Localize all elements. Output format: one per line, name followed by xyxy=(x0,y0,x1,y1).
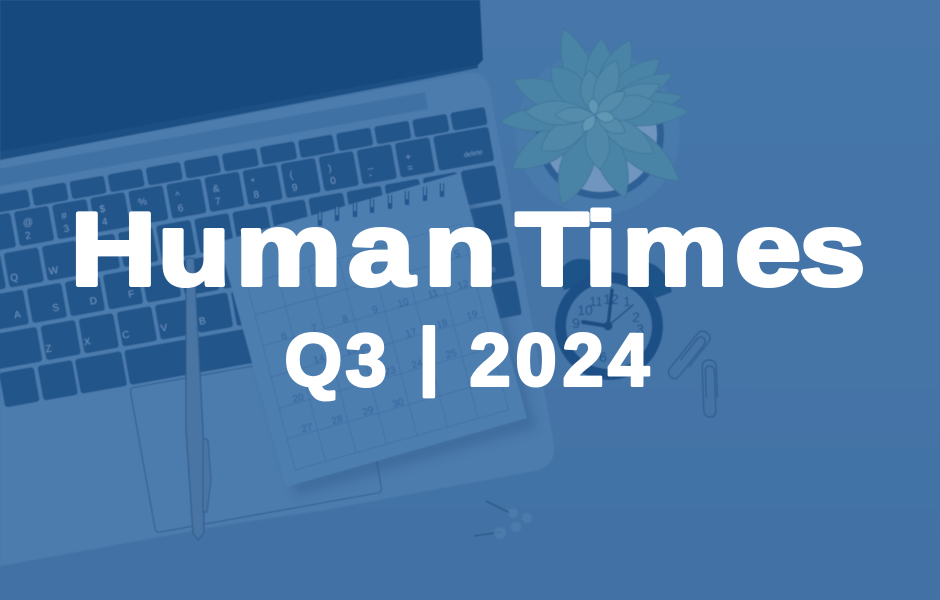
calendar numbers: 6 xyxy=(280,330,289,343)
key legends: 7 xyxy=(214,196,222,208)
pushpin bottom xyxy=(474,532,502,536)
key legends: A xyxy=(13,309,22,321)
key legends: Z xyxy=(45,343,53,355)
key legends: * xyxy=(250,177,256,188)
clock numerals: 2 xyxy=(632,309,640,325)
calendar numbers xyxy=(280,248,480,435)
calendar numbers: 28 xyxy=(330,414,345,427)
calendar spiral binding xyxy=(320,183,442,226)
laptop screen xyxy=(0,0,483,152)
key legends: enter xyxy=(455,225,472,235)
key legends: % xyxy=(137,196,148,209)
paperclip right xyxy=(702,360,718,417)
key legends: 3 xyxy=(63,223,71,235)
calendar numbers: 12 xyxy=(456,279,471,292)
key legends: 8 xyxy=(253,189,261,201)
key legends: _ xyxy=(365,159,374,171)
calendar numbers: 17 xyxy=(404,327,419,340)
calendar numbers: 18 xyxy=(435,318,450,331)
calendar sheet xyxy=(219,173,527,487)
calendar numbers: 8 xyxy=(341,313,350,326)
key legends: 9 xyxy=(291,182,299,194)
alarm clock xyxy=(555,259,672,380)
key legends: W xyxy=(48,265,60,278)
pot xyxy=(516,51,680,215)
calendar numbers: 25 xyxy=(444,348,459,361)
calendar numbers: 5 xyxy=(453,248,462,261)
speaker grille xyxy=(0,92,428,191)
key legends: 2 xyxy=(24,230,32,242)
calendar xyxy=(219,173,537,497)
pen clip xyxy=(203,438,211,512)
key legends: ( xyxy=(289,170,295,181)
calendar numbers: 30 xyxy=(391,397,406,410)
soil xyxy=(536,71,664,199)
keyboard xyxy=(0,82,549,561)
hinge xyxy=(0,65,478,160)
calendar numbers: 27 xyxy=(300,422,315,435)
subtitle: Q3 | 2024 xyxy=(284,314,649,402)
clock numerals: 6 xyxy=(599,349,607,365)
key legends: + xyxy=(404,152,412,164)
pen barrel xyxy=(186,258,204,540)
clock bells xyxy=(558,259,594,290)
key legends: V xyxy=(160,323,169,335)
calendar numbers: 15 xyxy=(344,344,359,357)
key legends: = xyxy=(406,163,414,174)
calendar shadow xyxy=(229,183,537,497)
key legends: - xyxy=(368,170,373,181)
clock numerals: 3 xyxy=(636,321,644,337)
succulent plant in pot xyxy=(499,24,689,215)
key legends: Q xyxy=(10,272,19,284)
calendar numbers: 23 xyxy=(383,365,398,378)
paperclips xyxy=(666,329,718,417)
laptop body xyxy=(0,73,554,566)
clock ring xyxy=(555,272,663,380)
calendar numbers: 24 xyxy=(410,358,425,371)
calendar numbers: 20 xyxy=(291,392,306,405)
clock hands xyxy=(583,290,633,326)
number key row xyxy=(0,127,494,253)
bottom key row xyxy=(0,280,522,408)
calendar grid xyxy=(247,224,508,470)
key legends: F xyxy=(127,289,135,301)
pushpin top xyxy=(486,501,510,513)
clock numerals xyxy=(572,291,644,365)
pebbles xyxy=(543,78,657,192)
key legends: ) xyxy=(327,163,332,174)
key legends: $ xyxy=(99,204,107,216)
QWERTY key row xyxy=(0,165,501,296)
key legends: shift xyxy=(482,267,496,276)
key legends: 6 xyxy=(177,203,185,215)
key legends: B xyxy=(198,316,207,328)
calendar numbers: 10 xyxy=(396,297,411,310)
clock numerals: 11 xyxy=(589,294,603,309)
calendar numbers: 14 xyxy=(312,353,327,366)
pushpins xyxy=(474,501,532,539)
key legends: ^ xyxy=(175,190,181,202)
trackpad xyxy=(130,347,382,533)
calendar numbers: 7 xyxy=(310,322,319,335)
laptop xyxy=(0,0,554,566)
leaves xyxy=(499,24,689,211)
key legends: 4 xyxy=(101,216,109,228)
title: Human Times xyxy=(70,191,866,307)
key legends: S xyxy=(52,302,60,314)
key legends: D xyxy=(89,296,98,308)
clock face xyxy=(566,283,652,369)
clock numerals: 12 xyxy=(603,291,619,307)
clock numerals: 1 xyxy=(623,294,631,309)
calendar numbers: 9 xyxy=(371,304,380,317)
clock numerals: 10 xyxy=(577,302,593,318)
pushpin heads xyxy=(494,508,532,539)
key legends: C xyxy=(121,329,131,342)
key legends: delete xyxy=(463,149,483,159)
key legends: X xyxy=(83,336,92,348)
clock numerals: 9 xyxy=(572,315,580,331)
function key row xyxy=(0,107,488,213)
key legends: & xyxy=(212,183,221,195)
paperclip left xyxy=(666,329,712,382)
key legends: 0 xyxy=(329,175,337,187)
pen xyxy=(186,258,211,540)
key legends: # xyxy=(60,211,68,222)
key legends xyxy=(0,136,504,360)
calendar numbers: 11 xyxy=(427,288,440,301)
calendar numbers: 29 xyxy=(361,405,376,418)
calendar numbers: 19 xyxy=(465,309,480,322)
key legends: @ xyxy=(22,217,34,229)
clock hub xyxy=(604,322,612,330)
home key row xyxy=(0,203,508,337)
shift key row xyxy=(0,242,515,375)
